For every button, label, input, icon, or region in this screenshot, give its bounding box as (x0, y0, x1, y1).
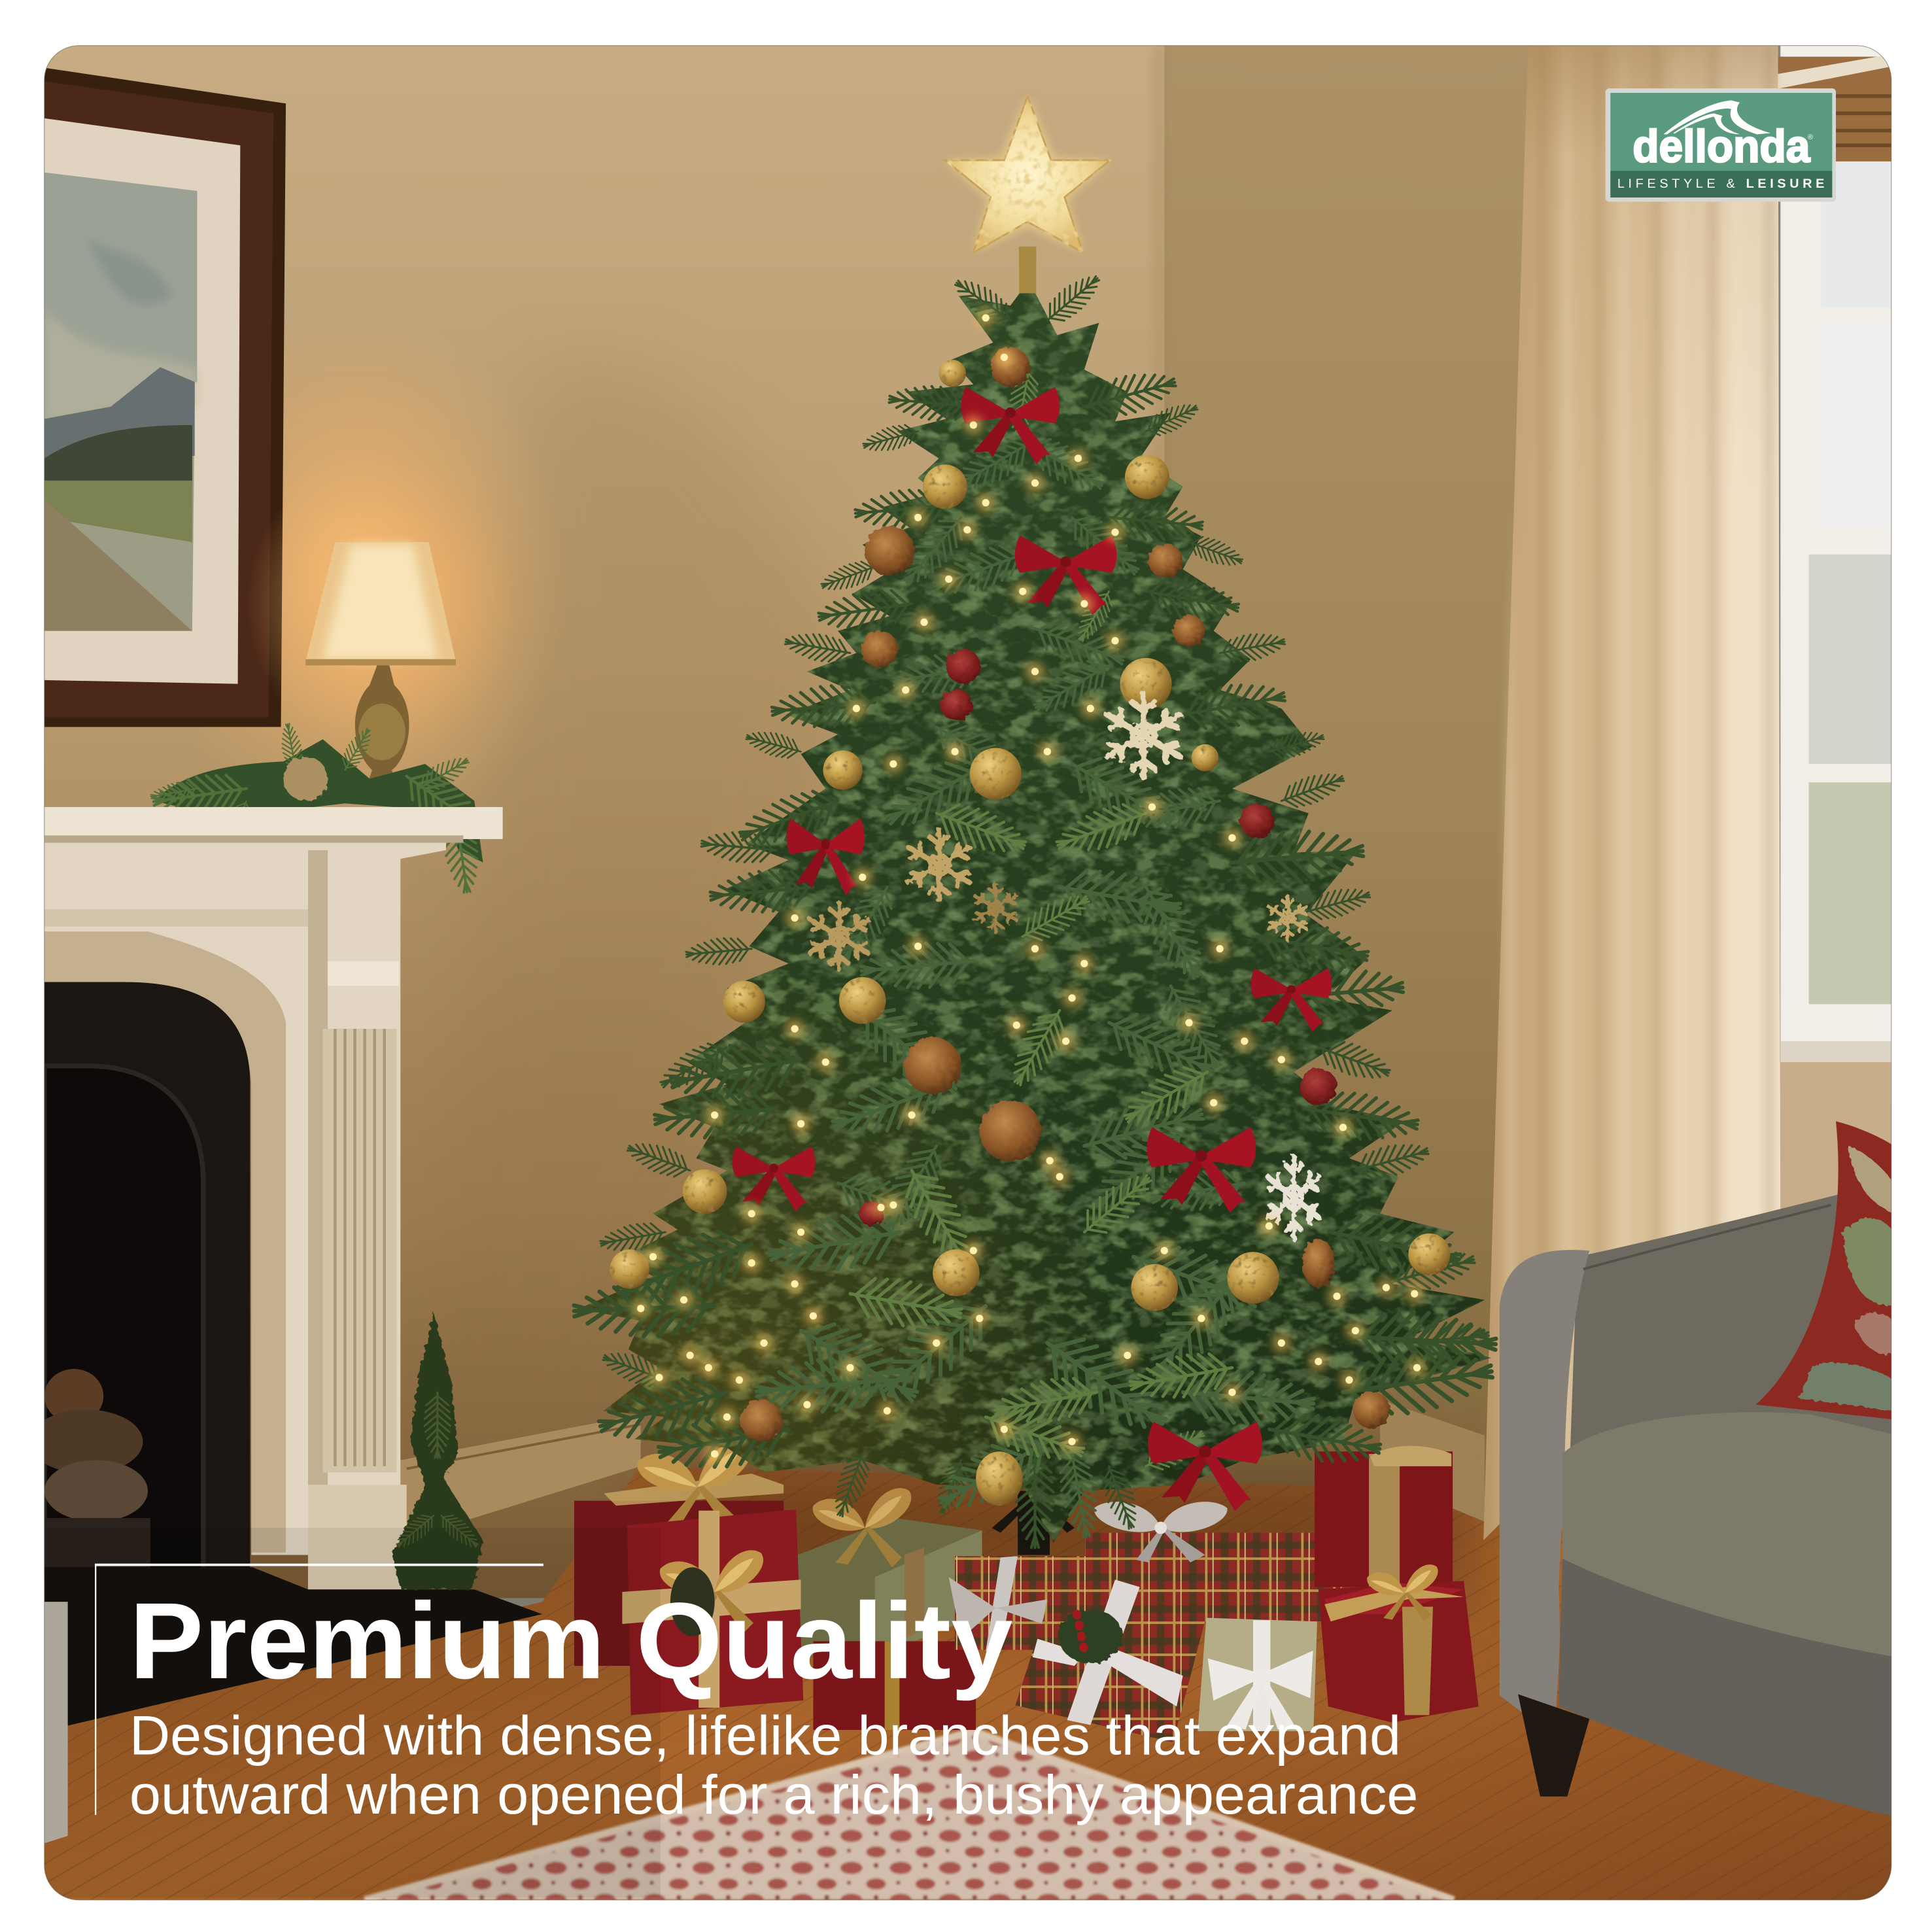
present: plaid left (949, 1556, 1090, 1651)
tree stand (992, 1491, 1075, 1555)
red berry clusters (859, 649, 1337, 1226)
rug (365, 1731, 1454, 1900)
mantel greenery (149, 723, 494, 894)
logs (29, 1369, 150, 1567)
caption bracket (95, 1564, 543, 1815)
fairy lights (641, 318, 1417, 1454)
tree silhouette (579, 281, 1491, 1543)
wooden floor (44, 1466, 1891, 1900)
firebox (44, 982, 250, 1577)
armchair (1500, 1183, 1897, 1818)
present: cream box (1198, 1618, 1317, 1731)
red bows (733, 387, 1332, 1511)
lower left shading (44, 1528, 661, 1897)
outer boughs (574, 268, 1497, 1547)
logo tagline: LIFESTYLE & LEISURE (1617, 177, 1824, 191)
present: plaid back (1086, 1502, 1342, 1621)
tree topper star (945, 96, 1110, 293)
hearth (44, 1567, 542, 1843)
present: red centre (813, 1641, 976, 1730)
present: red back left (574, 1441, 784, 1666)
logo wave mark (1663, 100, 1770, 134)
framed painting (44, 68, 286, 727)
brand logo (1606, 88, 1836, 201)
present: red right front (1319, 1564, 1479, 1723)
present: plaid tilted (1015, 1572, 1209, 1742)
present: green gold box (797, 1488, 982, 1657)
present: red right back (1315, 1446, 1453, 1587)
registered mark: ® (1808, 133, 1814, 141)
window blind (1778, 54, 1891, 162)
title: Premium Quality (129, 1581, 1013, 1702)
cushion (1756, 1121, 1894, 1419)
baseboard (400, 1402, 1485, 1525)
gold baubles (610, 360, 1450, 1506)
small decorative tree (392, 1312, 483, 1589)
inner boughs (754, 429, 1316, 1540)
window (1778, 46, 1894, 1210)
caption text (129, 1704, 1418, 1825)
table lamp (254, 515, 477, 779)
curtains (1483, 46, 1780, 1540)
logo wordmark: dellonda (1632, 121, 1811, 172)
room walls (44, 46, 1534, 1598)
fireplace mantel (44, 807, 503, 1589)
highlight boughs (846, 368, 1235, 1477)
caption text: Designed with dense, lifelike branches that expand (129, 1704, 1401, 1767)
needle texture (567, 271, 1503, 1553)
snowflake ornaments (810, 694, 1319, 1238)
christmas tree (567, 268, 1503, 1555)
present group (574, 1441, 1479, 1742)
caption text: outward when opened for a rich, bushy appearance (129, 1763, 1418, 1825)
present: red front (622, 1509, 803, 1715)
copper pine cones (740, 347, 1390, 1441)
